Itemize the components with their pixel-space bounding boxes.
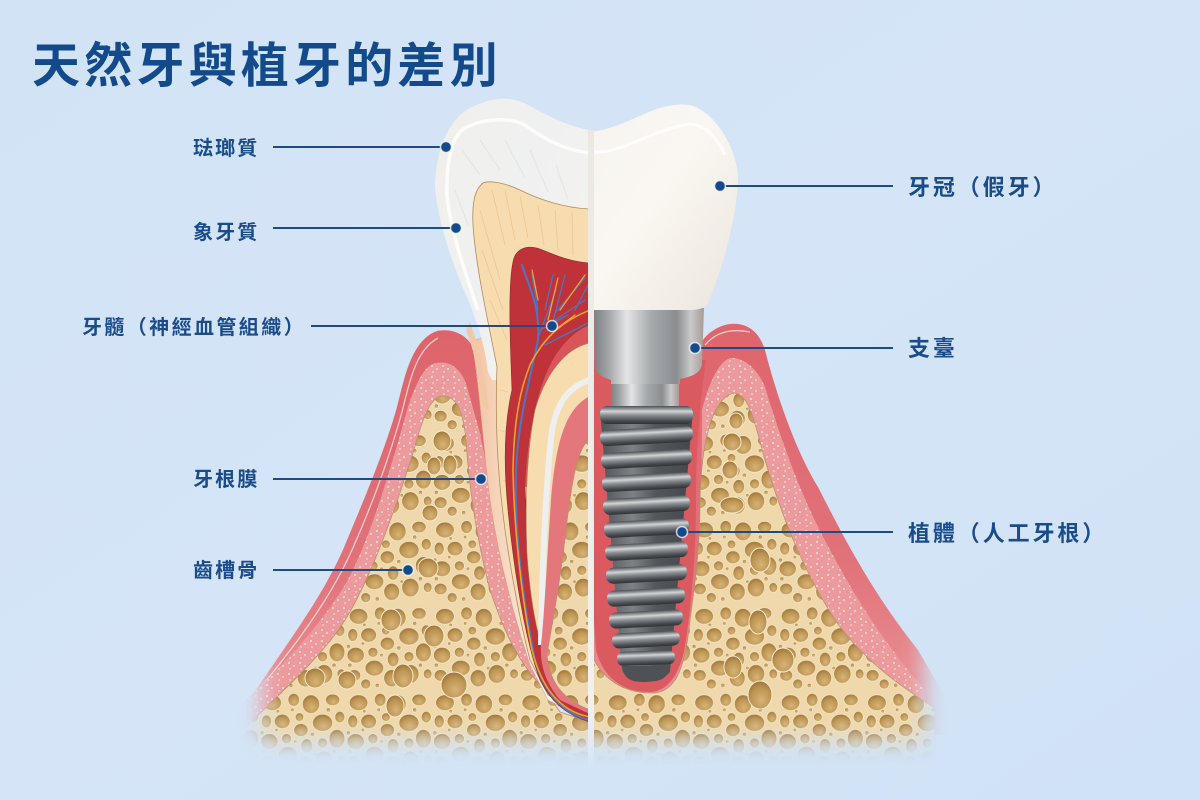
- label: enamel: 琺瑯質: [193, 136, 259, 160]
- label: crown: 牙冠（假牙）: [908, 175, 1057, 200]
- second root ligament: [541, 380, 590, 645]
- enamel: [435, 99, 590, 410]
- title: 天然牙與植牙的差別: [32, 40, 502, 93]
- nerves and vessels: [513, 265, 590, 720]
- label: abutment: [690, 336, 958, 361]
- large bone pores left: [305, 431, 467, 717]
- label: alveolar bone: [193, 559, 414, 582]
- gum tissue right: [590, 300, 950, 735]
- bone between roots: [547, 440, 590, 710]
- label: crown: [714, 175, 1057, 200]
- gum between roots: [541, 396, 590, 714]
- panel: dental implant (right half): [590, 104, 950, 770]
- label: implant body: [676, 521, 1107, 546]
- second root dentin: [526, 343, 590, 645]
- label: enamel: [193, 136, 452, 160]
- label: dentin: [193, 220, 462, 244]
- label: abutment: 支臺: [908, 336, 958, 361]
- label: alveolar bone: 齒槽骨: [193, 559, 259, 582]
- alveolar bone right: [590, 393, 935, 770]
- crown: [590, 104, 738, 310]
- label: periodontal ligament: 牙根膜: [193, 468, 259, 491]
- implant socket lining: [594, 360, 706, 692]
- label: implant body: 植體（人工牙根）: [908, 521, 1107, 546]
- implant screw: [600, 380, 693, 682]
- periodontal ligament and tooth root shell: [474, 338, 560, 706]
- label: pulp: [82, 315, 558, 339]
- gum tissue left: [235, 330, 545, 730]
- divider: [588, 130, 594, 775]
- abutment: [594, 308, 704, 384]
- pulp: [505, 247, 590, 722]
- label: periodontal ligament: [193, 468, 486, 491]
- panel: natural tooth (left half): [235, 99, 590, 770]
- large bone pores right: [720, 413, 794, 709]
- inner pulp highlight: [525, 325, 590, 487]
- label: dentin: 象牙質: [193, 220, 259, 244]
- label: pulp: 牙髓（神經血管組織）: [82, 315, 306, 339]
- alveolar bone left: [235, 396, 590, 770]
- dentin: [473, 182, 590, 720]
